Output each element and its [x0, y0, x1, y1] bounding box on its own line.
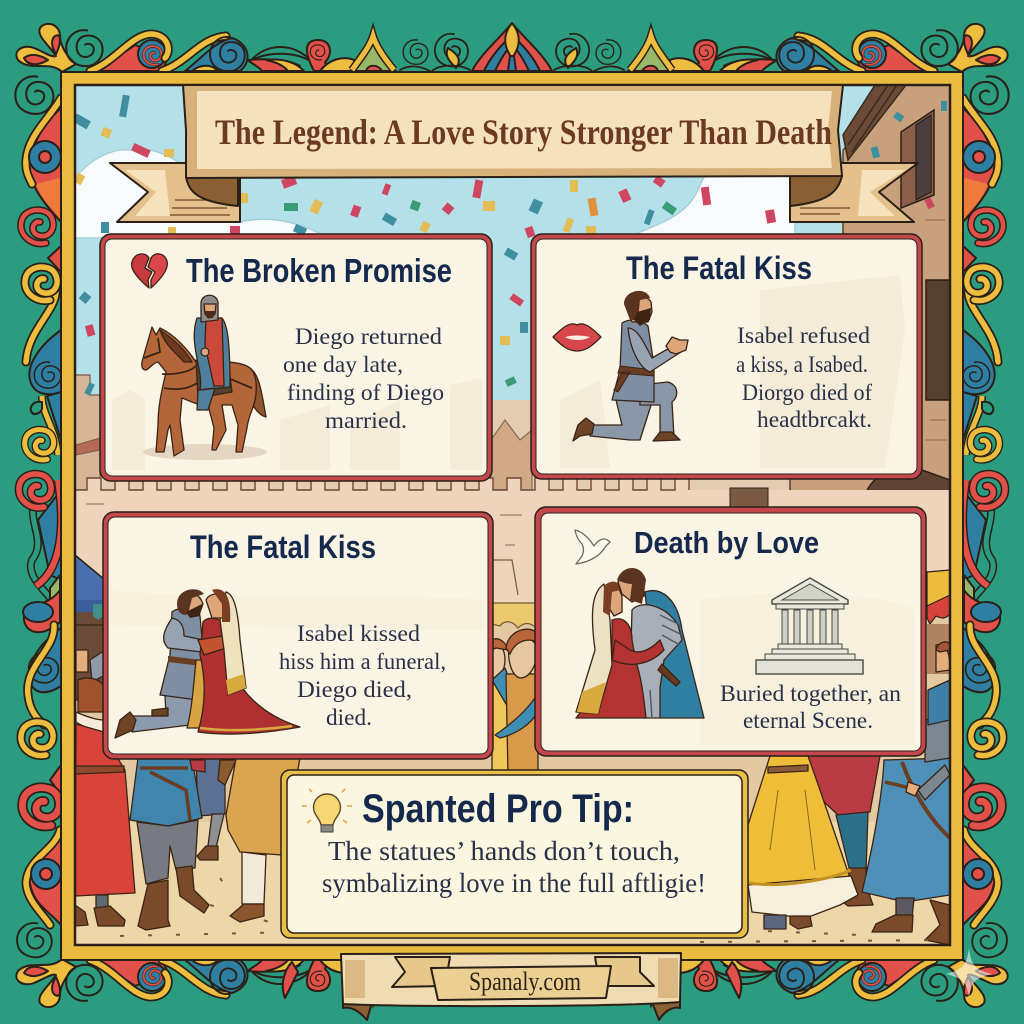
- body text: eternal Scene.: [743, 708, 873, 733]
- heading: The Broken Promise: [186, 252, 452, 289]
- body text: [279, 621, 446, 730]
- distant town: [75, 375, 810, 490]
- icon: dove: [575, 530, 610, 564]
- body text: finding of Diego: [287, 380, 444, 405]
- illustration: couple kissing, knight kneeling: [115, 589, 300, 738]
- ornament: left border scrolls: [15, 76, 61, 957]
- tip text: [322, 836, 706, 898]
- gold frame: [61, 72, 963, 960]
- ground: [75, 822, 950, 945]
- illustration: embracing couple: [576, 568, 704, 718]
- heading: The Fatal Kiss: [626, 250, 812, 286]
- ornament: right border scrolls: [963, 76, 1009, 957]
- body text: [736, 323, 872, 432]
- crowd left side: [75, 625, 300, 930]
- tip text: The statues’ hands don’t touch,: [328, 836, 680, 866]
- clouds: [75, 149, 795, 238]
- sky: [76, 86, 874, 400]
- body text: Diego returned: [295, 324, 443, 349]
- body text: married.: [325, 408, 407, 433]
- icon: lips: [553, 324, 601, 351]
- confetti: [73, 95, 947, 396]
- illustration: kneeling knight: [573, 291, 688, 441]
- panel: Death by Love: [535, 507, 926, 756]
- crowd between the lower panels: [492, 629, 538, 775]
- illustration: marble temple tomb: [756, 578, 863, 674]
- body text: died.: [326, 705, 372, 730]
- crowd right side: [748, 642, 950, 945]
- footer ribbon: [392, 957, 654, 987]
- body text: headtbrcakt.: [757, 407, 872, 432]
- right tent: [927, 570, 950, 606]
- body text: Isabel kissed: [297, 621, 421, 646]
- body text: hiss him a funeral,: [279, 649, 446, 674]
- right building: [790, 85, 950, 525]
- frame inner border line: [75, 85, 950, 945]
- icon: light bulb: [302, 789, 352, 832]
- ornament: top border scrolls: [16, 23, 1008, 72]
- left ribbon: [110, 163, 240, 222]
- ribbon highlights: [125, 170, 905, 216]
- body text: Isabel refused: [737, 323, 871, 348]
- ornament: bottom drop leaves: [283, 962, 741, 998]
- icon: broken heart: [132, 254, 167, 288]
- footer banner: [341, 953, 681, 1020]
- body text: [720, 681, 902, 733]
- city wall with battlements: [75, 478, 950, 605]
- market stalls: [75, 555, 950, 825]
- right ribbon: [790, 163, 918, 222]
- body text: Diego died,: [297, 677, 412, 702]
- heading: Death by Love: [634, 525, 819, 560]
- illustration: knight on horse: [142, 295, 267, 460]
- heading: Spanted Pro Tip:: [362, 787, 634, 831]
- ornament: bottom border scrolls: [16, 959, 1008, 1007]
- title banner: [110, 85, 918, 222]
- title text: The Legend: A Love Story Stronger Than Death: [215, 112, 832, 152]
- body text: one day late,: [283, 352, 403, 377]
- body text: Buried together, an: [720, 681, 902, 706]
- panel: The Fatal Kiss (lower): [103, 512, 493, 759]
- panel: The Broken Promise: [100, 234, 492, 481]
- left awning: [76, 555, 102, 600]
- parchment: [183, 85, 843, 178]
- tip text: symbalizing love in the full aftligie!: [322, 868, 706, 898]
- panel: pro tip: [281, 770, 748, 938]
- icon: sparkle: [946, 948, 992, 998]
- heading: The Fatal Kiss: [190, 529, 376, 565]
- body text: Diorgo died of: [742, 380, 872, 405]
- ground pebbles: [120, 878, 950, 942]
- body text: a kiss, a Isabed.: [736, 352, 868, 377]
- body text: [283, 324, 444, 433]
- centre tent: [492, 603, 536, 628]
- panel: The Fatal Kiss (upper): [531, 234, 922, 479]
- website text: Spanaly.com: [469, 967, 581, 996]
- background scene: [73, 85, 950, 945]
